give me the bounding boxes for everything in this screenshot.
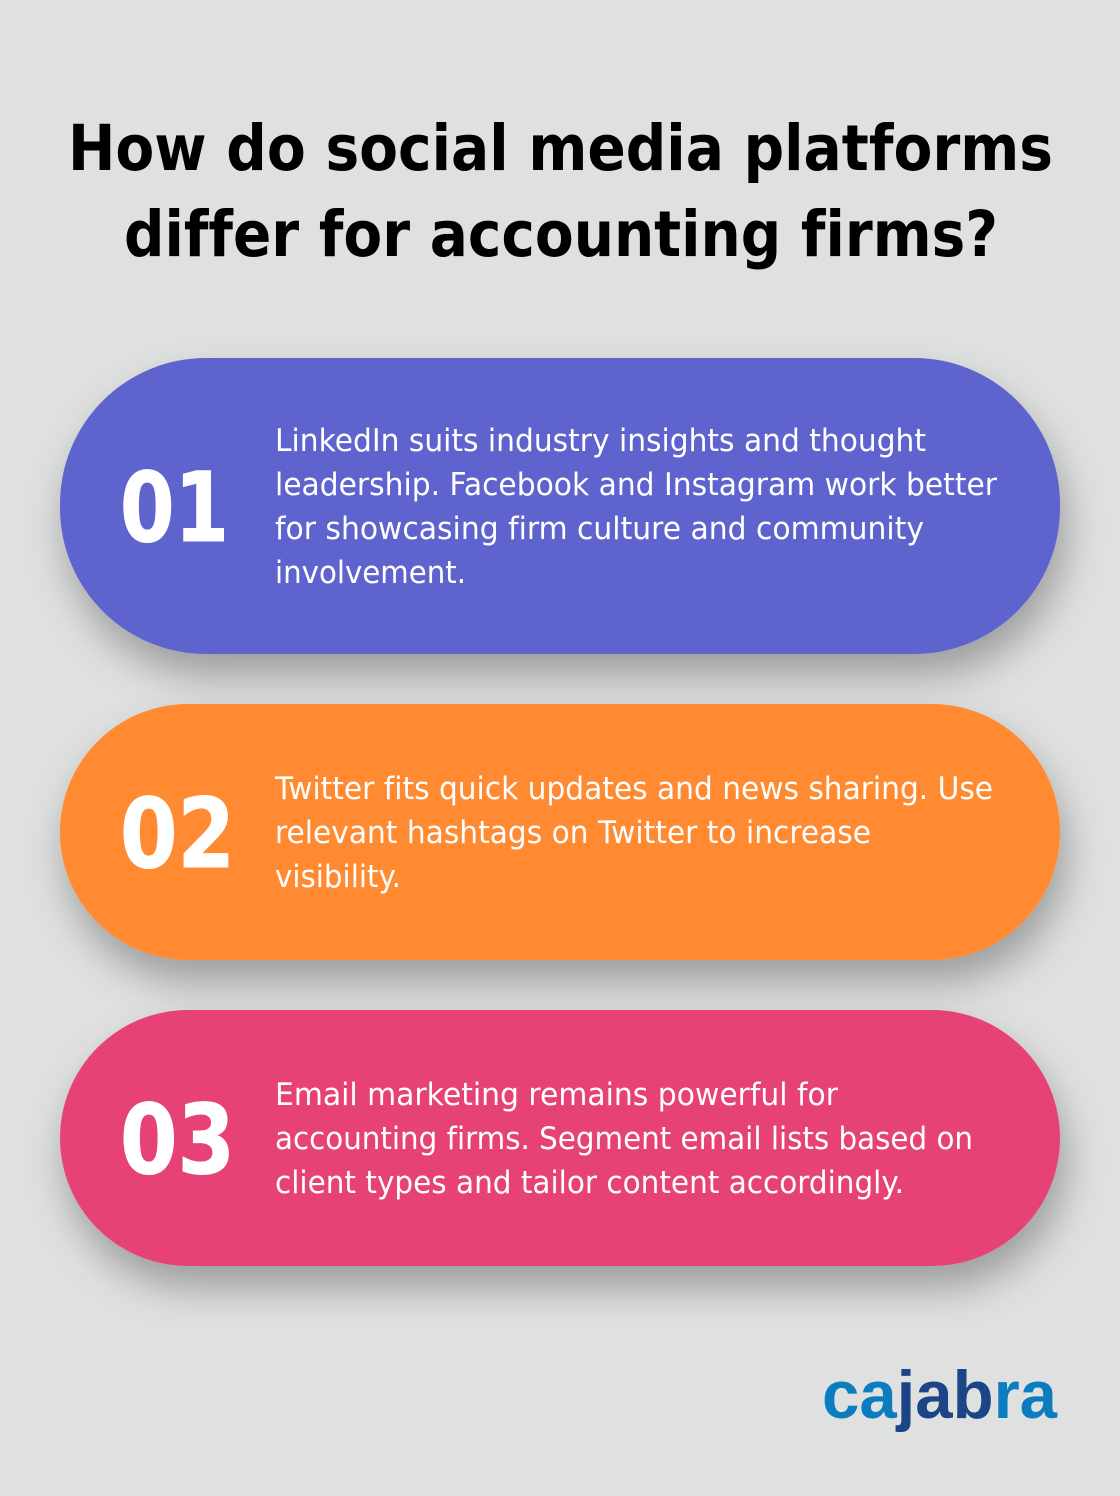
logo: cajabra: cajabra: [822, 1357, 1058, 1433]
number 01: 01: [120, 452, 229, 564]
pill background 02: [60, 704, 1060, 960]
pill background 03: [60, 1010, 1060, 1266]
number 03: 03: [120, 1084, 235, 1196]
number 02: 02: [120, 778, 235, 890]
text block 01: involvement.: [275, 555, 466, 591]
pill background 01: [60, 358, 1060, 654]
text block 02: [274, 771, 993, 895]
text block 02: Twitter fits quick updates and news sharing. Use: [274, 771, 993, 807]
text block 03: [275, 1077, 973, 1201]
panel: 03 Email marketing: [60, 1010, 1060, 1266]
title: differ for accounting firms?: [124, 198, 998, 271]
title: [68, 112, 1053, 271]
text block 01: [275, 423, 997, 591]
panel: 02 Twitter: [60, 704, 1060, 960]
text block 02: visibility.: [275, 859, 401, 895]
text block 03: client types and tailor content accordingly.: [275, 1165, 904, 1201]
text block 01: for showcasing firm culture and community: [275, 511, 924, 547]
text block 01: LinkedIn suits industry insights and thought: [275, 423, 926, 459]
text block 01: leadership. Facebook and Instagram work better: [275, 467, 997, 503]
text block 02: relevant hashtags on Twitter to increase: [275, 815, 871, 851]
text block 03: accounting firms. Segment email lists based on: [275, 1121, 973, 1157]
text block 03: Email marketing remains powerful for: [275, 1077, 838, 1113]
panel: 01 LinkedIn, Facebook and Instagram: [60, 358, 1060, 654]
